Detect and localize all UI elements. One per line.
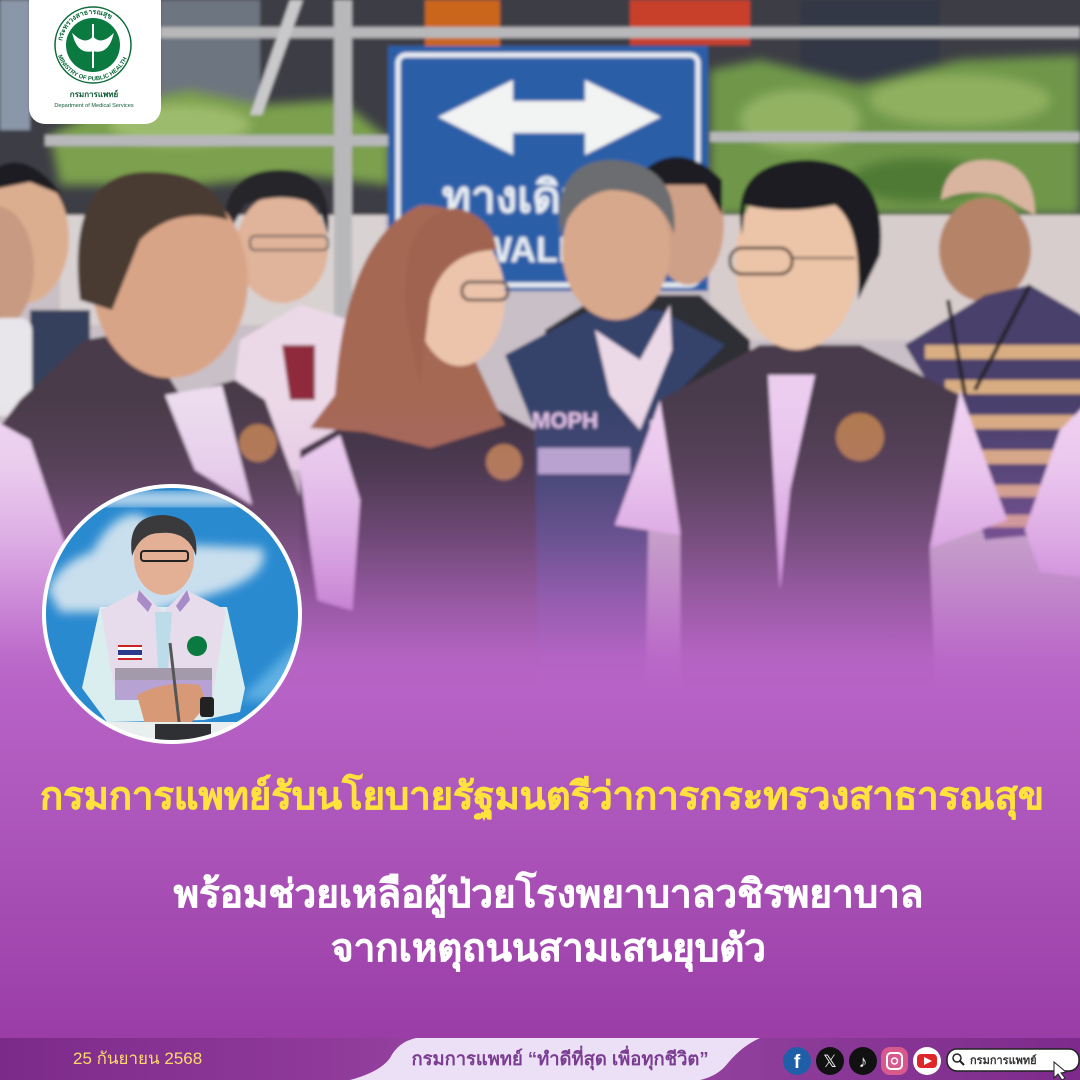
purple fade overlay (0, 400, 1080, 1080)
social icons: f (794, 1052, 801, 1073)
logo emblem: MINISTRY OF PUBLIC HEALTH (58, 54, 127, 80)
man with glasses back (236, 193, 328, 303)
man back center (652, 165, 724, 285)
social icons: 𝕏 (823, 1052, 837, 1071)
date: 25 กันยายน 2568 (73, 1049, 202, 1068)
background photo: officials at the road site: MOPH (532, 408, 598, 433)
portrait head (134, 532, 194, 595)
social icons (783, 1047, 1080, 1080)
subheadline white (174, 870, 923, 972)
subheadline white: พร้อมช่วยเหลือผู้ป่วยโรงพยาบาลวชิรพยาบาล (174, 873, 923, 916)
street sign: WALK (478, 229, 584, 270)
woman (300, 400, 542, 780)
slogan ribbon (350, 1038, 760, 1080)
inset portrait photo (42, 484, 302, 744)
main right man (660, 345, 960, 780)
street sign: ทางเดิน (442, 173, 591, 222)
logo emblem (54, 6, 134, 109)
social icons: ♪ (859, 1052, 867, 1071)
headline yellow: กรมการแพทย์รับนโยบายรัฐมนตรีว่าการกระทรวงสาธารณสุข (40, 775, 1044, 818)
subheadline white: จากเหตุถนนสามเสนยุบตัว (331, 927, 766, 970)
footer bar (0, 1038, 1080, 1080)
logo panel (29, 0, 161, 124)
street sign (388, 46, 708, 291)
portrait vest (101, 590, 226, 700)
main left man (0, 330, 310, 780)
hedge (50, 55, 1080, 215)
search box (947, 1049, 1079, 1071)
logo text: กรมการแพทย์ (70, 89, 119, 99)
logo emblem: Department of Medical Services (54, 103, 134, 109)
social icons: กรมการแพทย์ (970, 1054, 1037, 1067)
slogan ribbon: กรมการแพทย์ “ทำดีที่สุด เพื่อทุกชีวิต” (411, 1045, 709, 1071)
logo emblem: กระทรวงสาธารณสุข (58, 10, 112, 40)
man center in navy vest (505, 310, 725, 780)
far left partially visible person (0, 206, 34, 330)
man far left back (0, 173, 69, 303)
rails (45, 0, 1080, 320)
portrait sleeves (82, 607, 245, 722)
man in cap right (939, 198, 1031, 302)
